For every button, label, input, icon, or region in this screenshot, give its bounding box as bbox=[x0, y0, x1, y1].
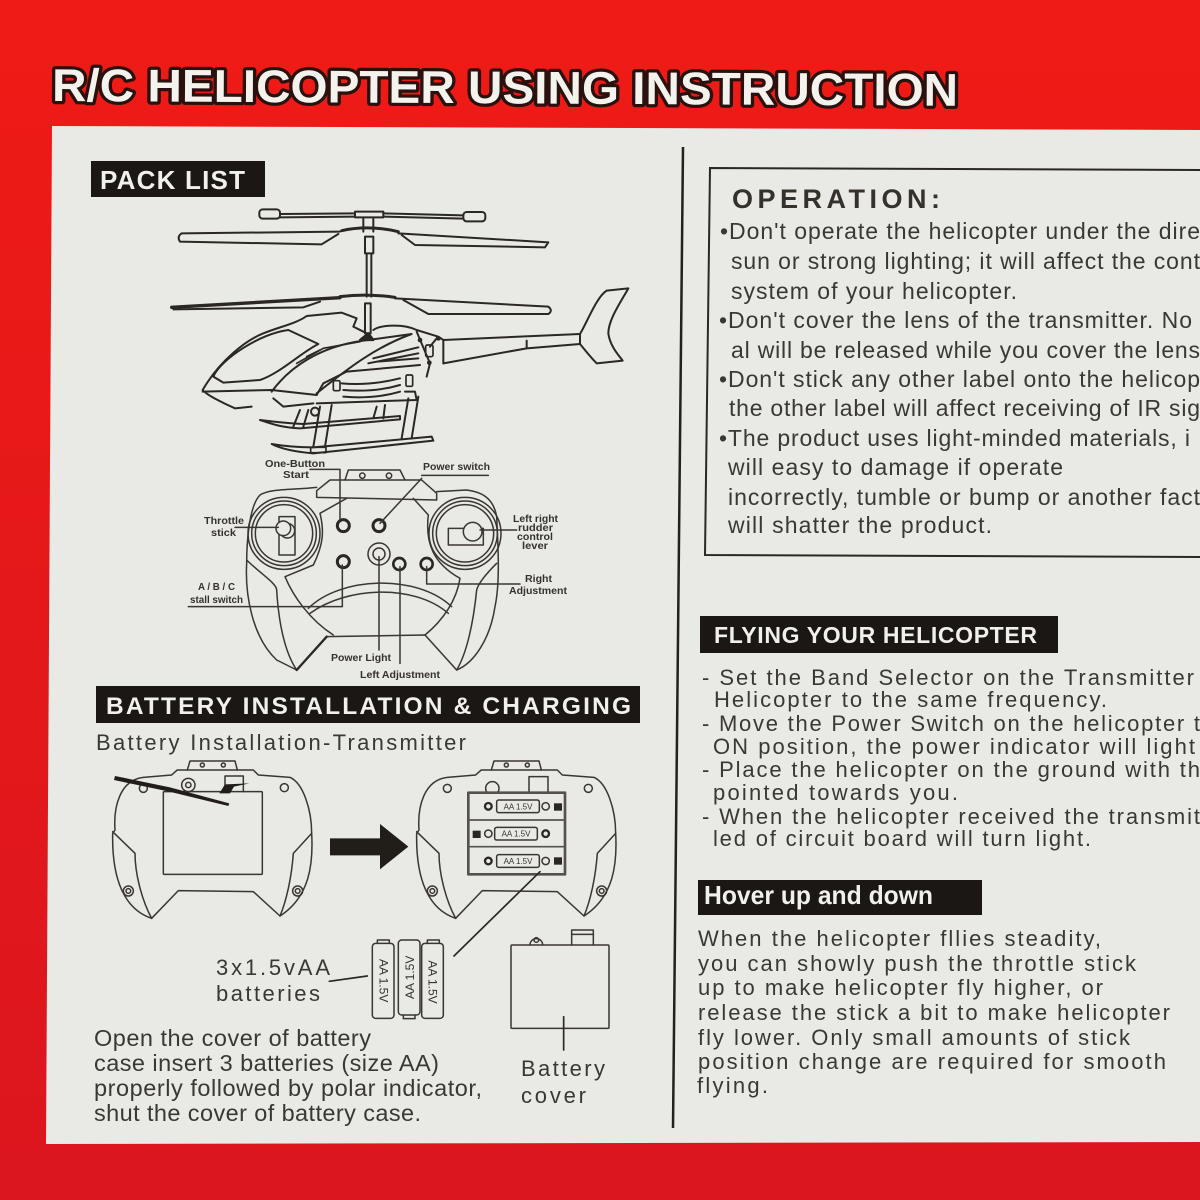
flying text: Helicopter to the same frequency. bbox=[714, 687, 1107, 712]
flying text: ON position, the power indicator will light bbox=[713, 734, 1195, 759]
transmitter line drawing bbox=[188, 469, 520, 670]
battery heading: BATTERY INSTALLATION & CHARGING bbox=[106, 693, 631, 720]
hover text: up to make helicopter fly higher, or bbox=[698, 975, 1103, 1000]
transmitter back with batteries: AA 1.5V bbox=[504, 802, 533, 811]
label: left right: Left right bbox=[513, 513, 558, 525]
battery instructions: properly followed by polar indicator, bbox=[94, 1075, 482, 1101]
battery cover label: Battery bbox=[521, 1056, 605, 1081]
operation text: incorrectly, tumble or bump or another fact bbox=[728, 484, 1200, 510]
flying text: - Move the Power Switch on the helicopter t bbox=[702, 711, 1200, 736]
hover text: flying. bbox=[697, 1073, 768, 1098]
label: right: Right bbox=[525, 573, 553, 585]
flying text: - When the helicopter received the transmit bbox=[702, 804, 1200, 829]
flying text: - Place the helicopter on the ground with th bbox=[702, 757, 1200, 782]
transmitter back with batteries: AA 1.5V bbox=[504, 857, 533, 866]
label: throttle: Throttle bbox=[204, 515, 244, 527]
hover text: When the helicopter fllies steadity, bbox=[698, 926, 1101, 951]
operation text: •The product uses light-minded materials, i bbox=[719, 425, 1190, 451]
column divider bbox=[673, 147, 683, 1128]
panel: battery installation bbox=[94, 686, 640, 1126]
operation text: will shatter the product. bbox=[727, 512, 992, 538]
hover text: fly lower. Only small amounts of stick bbox=[698, 1025, 1131, 1050]
batteries label bbox=[216, 955, 330, 1006]
battery instructions: shut the cover of battery case. bbox=[94, 1100, 421, 1126]
label: lever: lever bbox=[522, 540, 548, 552]
flying heading: FLYING YOUR HELICOPTER bbox=[714, 622, 1037, 648]
battery diagrams bbox=[113, 761, 616, 1050]
battery subheading: Battery Installation-Transmitter bbox=[96, 730, 466, 755]
label: stick: stick bbox=[211, 527, 236, 539]
battery cover label bbox=[521, 1056, 605, 1108]
label: power light: Power Light bbox=[331, 652, 391, 664]
flying text: led of circuit board will turn light. bbox=[713, 826, 1091, 851]
three AA batteries: AA 1.5V bbox=[403, 956, 417, 999]
three AA batteries: AA 1.5V bbox=[376, 959, 390, 1002]
battery cover bbox=[511, 930, 609, 1050]
flying text bbox=[702, 665, 1200, 851]
flying text: - Set the Band Selector on the Transmitter bbox=[702, 665, 1194, 690]
hover text: you can showly push the throttle stick bbox=[698, 951, 1137, 976]
battery instructions: case insert 3 batteries (size AA) bbox=[94, 1050, 439, 1076]
operation text: •Don't cover the lens of the transmitter. No bbox=[719, 307, 1192, 333]
operation text bbox=[719, 218, 1200, 538]
helicopter line drawing bbox=[172, 209, 628, 453]
hover text: position change are required for smooth bbox=[698, 1049, 1166, 1074]
operation heading: OPERATION: bbox=[732, 184, 940, 214]
label: left adjustment: Left Adjustment bbox=[360, 669, 440, 681]
arrow bbox=[330, 824, 408, 869]
hover heading: Hover up and down bbox=[704, 880, 933, 910]
panel: operation bbox=[705, 168, 1200, 557]
operation text: •Don't stick any other label onto the helicop bbox=[719, 366, 1200, 392]
panel: pack list bbox=[91, 161, 628, 681]
panel: hover up and down bbox=[697, 880, 1170, 1098]
pack list heading bbox=[91, 161, 265, 197]
battery instructions: Open the cover of battery bbox=[94, 1025, 371, 1051]
label: rudder: rudder bbox=[518, 522, 553, 534]
transmitter back with cover bbox=[113, 761, 312, 918]
operation text: system of your helicopter. bbox=[731, 278, 1017, 304]
transmitter diagram bbox=[188, 458, 568, 681]
three AA batteries: AA 1.5V bbox=[426, 960, 440, 1004]
label: start: Start bbox=[283, 469, 310, 481]
flying text: pointed towards you. bbox=[713, 780, 958, 805]
battery cover label: cover bbox=[521, 1083, 586, 1108]
label: control: control bbox=[517, 531, 553, 543]
panel: flying your helicopter bbox=[700, 616, 1200, 851]
label: a/b/c: A / B / C bbox=[198, 581, 235, 593]
operation text: will easy to damage if operate bbox=[727, 454, 1063, 480]
transmitter back with batteries bbox=[417, 761, 616, 956]
label: adjustment: Adjustment bbox=[509, 585, 568, 597]
hover text bbox=[697, 926, 1170, 1098]
label: power switch: Power switch bbox=[423, 461, 490, 473]
operation text: the other label will affect receiving of IR sig bbox=[729, 395, 1200, 421]
operation text: •Don't operate the helicopter under the dire bbox=[720, 218, 1200, 244]
label: stall switch: stall switch bbox=[190, 594, 243, 606]
three AA batteries bbox=[329, 940, 443, 1019]
operation text: al will be released while you cover the lens bbox=[731, 337, 1200, 363]
title: R/C HELICOPTER USING INSTRUCTION bbox=[52, 59, 958, 116]
transmitter back with batteries: AA 1.5V bbox=[502, 830, 531, 839]
battery instructions bbox=[94, 1025, 482, 1126]
hover text: release the stick a bit to make helicopter bbox=[698, 1000, 1170, 1025]
operation text: sun or strong lighting; it will affect the cont bbox=[731, 248, 1200, 274]
batteries label: 3x1.5vAA bbox=[216, 955, 330, 980]
pack list heading: PACK LIST bbox=[100, 165, 245, 195]
flying heading bbox=[700, 616, 1058, 653]
label: one-button start: One-Button bbox=[265, 458, 325, 470]
operation border bbox=[705, 168, 1200, 557]
batteries label: batteries bbox=[216, 981, 320, 1006]
